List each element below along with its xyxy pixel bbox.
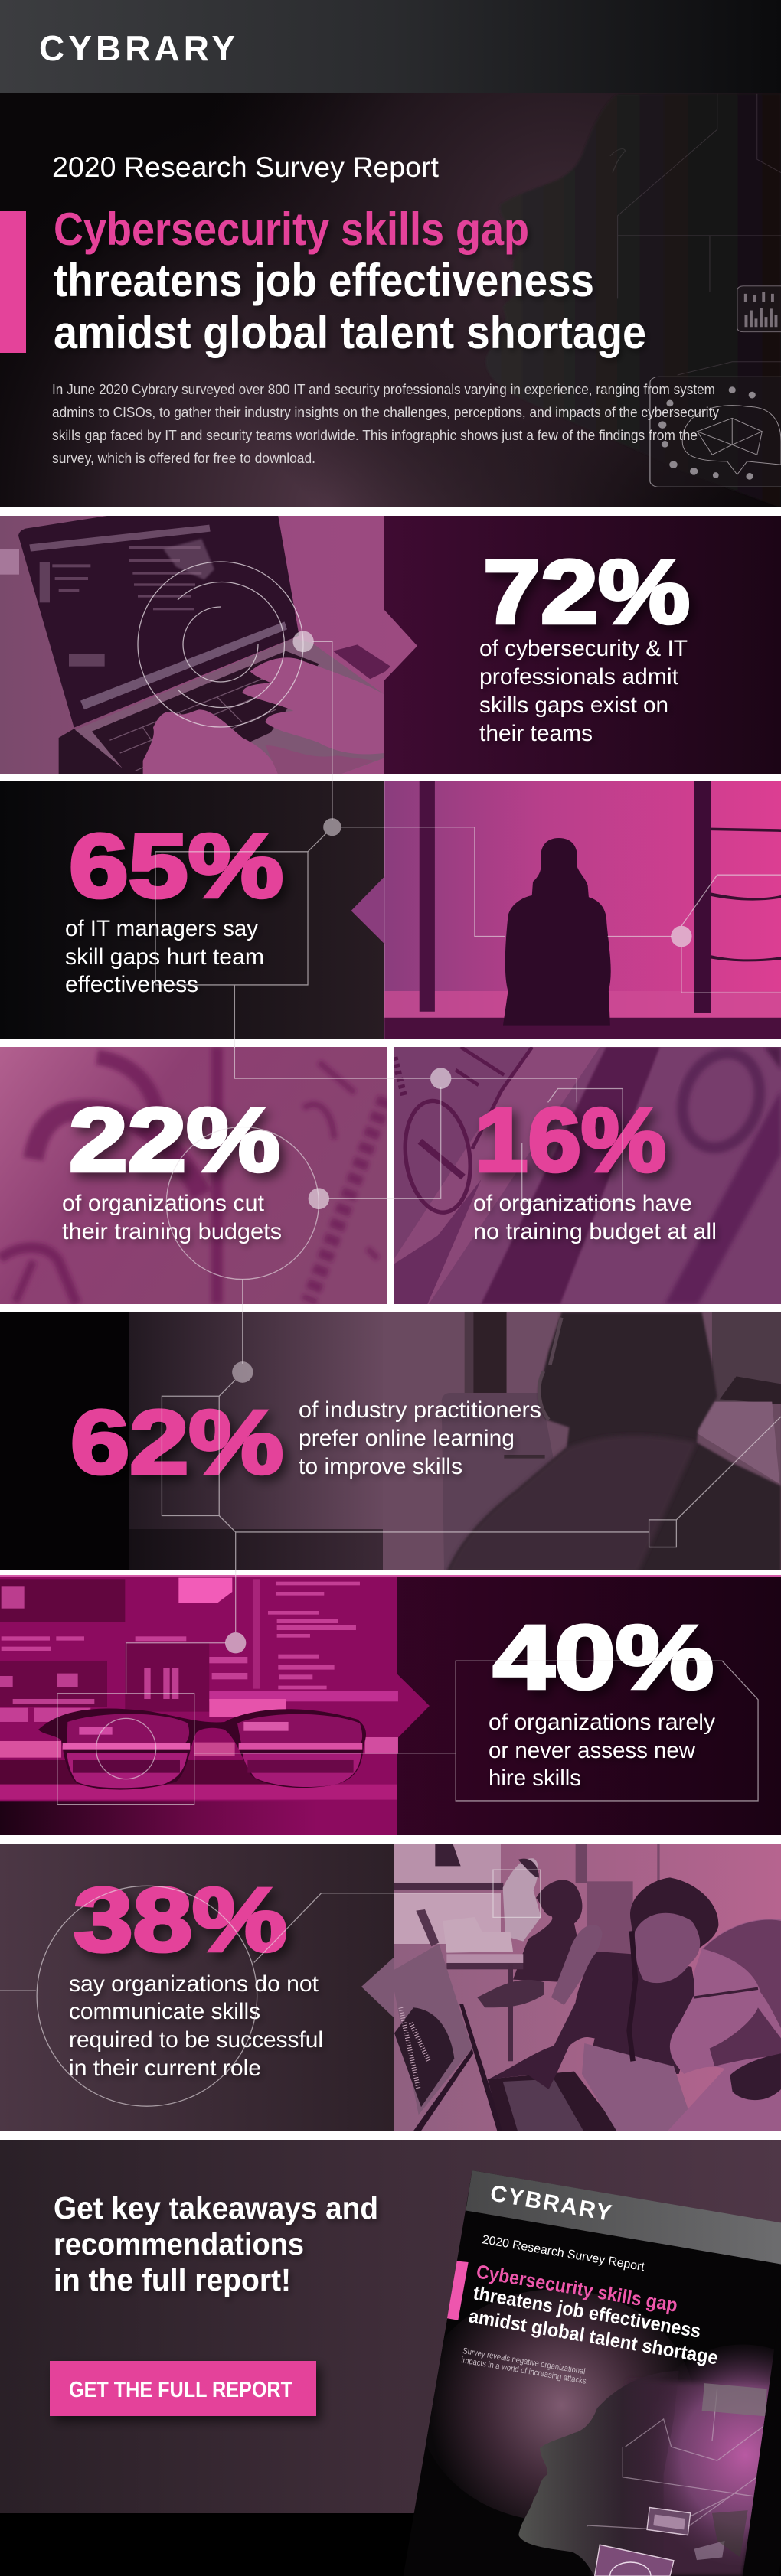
button: get the full report: [50, 2361, 316, 2416]
description: communicate skills: [69, 1999, 260, 2024]
node: [309, 1188, 329, 1209]
description: effectiveness: [65, 972, 198, 997]
panel: 72% stat: [0, 516, 781, 774]
image: team around a laptop: [390, 1844, 781, 2133]
image: blurred currency: [0, 1047, 385, 1304]
node: [323, 818, 341, 836]
image: glasses in front of code screen: [0, 1577, 430, 1837]
image: laptop and hands: [0, 516, 423, 774]
image: brain network widget: [650, 377, 781, 487]
chevron notch: [0, 1844, 394, 2131]
stat 40%: 40%: [493, 1607, 714, 1708]
heading: call to action: Get key takeaways and: [54, 2190, 378, 2225]
divider: pink line above 40% panel: [0, 1575, 781, 1577]
intro paragraph: survey, which is offered for free to download.: [52, 451, 315, 466]
description: their training budgets: [62, 1219, 282, 1244]
description: say organizations do not: [69, 1971, 319, 1997]
image: report cover: Cybersecurity skills gap: [475, 2261, 679, 2317]
connector network: [0, 631, 781, 2106]
node: [430, 1068, 451, 1089]
title: threatens job effectiveness: [54, 255, 594, 306]
stat 62%: 62%: [70, 1392, 283, 1493]
description: of cybersecurity & IT: [479, 636, 688, 661]
image: currency close-up: [394, 1042, 781, 1304]
description: to improve skills: [299, 1454, 462, 1479]
heading: call to action: [54, 2190, 378, 2297]
description: required to be successful: [69, 2027, 323, 2053]
stat 16%: 16%: [475, 1090, 666, 1191]
description: [489, 1710, 715, 1791]
description: [473, 1191, 717, 1244]
description: hire skills: [489, 1766, 581, 1791]
node: [232, 1361, 253, 1383]
panel: 62% stat: [0, 1312, 781, 1573]
image: report cover: 2020 Research Survey Report: [481, 2233, 646, 2274]
stat 22%: 22%: [69, 1090, 280, 1191]
title: amidst global talent shortage: [54, 307, 646, 358]
image: concentric arcs: [138, 562, 303, 727]
description: [299, 1397, 541, 1479]
description: skill gaps hurt team: [65, 944, 264, 970]
panel: 38% stat: [0, 1844, 781, 2133]
header bar: [0, 0, 781, 93]
intro paragraph: In June 2020 Cybrary surveyed over 800 IT and security professionals varying in experience, ranging from system: [52, 382, 715, 397]
image: chart widget: [737, 286, 781, 332]
image: report cover: CYBRARY: [489, 2180, 613, 2226]
description: in their current role: [69, 2056, 261, 2081]
panel: call to action: [0, 2140, 781, 2576]
description: [69, 1971, 323, 2081]
panel: 16% stat: [394, 1042, 781, 1304]
chevron panel background: [384, 516, 781, 774]
button: get the full report: GET THE FULL REPORT: [69, 2378, 292, 2402]
stat 38%: 38%: [74, 1870, 287, 1971]
image: report cover: Survey reveals negative organizational: [462, 2346, 586, 2376]
description: skills gaps exist on: [479, 693, 668, 718]
description: of industry practitioners: [299, 1397, 541, 1423]
heading: survey label: 2020 Research Survey Report: [52, 152, 440, 183]
stat 65%: 65%: [69, 816, 283, 917]
description: their teams: [479, 721, 593, 746]
node: [292, 631, 314, 652]
description: of organizations have: [473, 1191, 692, 1216]
description: [66, 920, 263, 992]
title: Cybersecurity skills gap: [54, 204, 529, 255]
description: [62, 1191, 282, 1244]
panel: 22% stat: [0, 1047, 387, 1304]
heading: call to action: recommendations: [54, 2226, 304, 2261]
description: of IT managers say: [65, 916, 258, 941]
logo: CYBRARY: [39, 28, 235, 68]
image: face silhouette: [485, 94, 781, 508]
image: laptop chevron tip: [361, 1958, 394, 2017]
image: report cover: amidst global talent shortage: [467, 2305, 720, 2369]
panel: hero: [0, 93, 781, 508]
image: silhouetted person by the sea: [351, 779, 781, 1042]
image: person with headphones: [383, 1312, 781, 1573]
image: report cover: threatens job effectiveness: [472, 2282, 702, 2343]
description: or never assess new: [489, 1738, 695, 1763]
accent bar: [0, 211, 26, 353]
image: report cover: [398, 2170, 781, 2576]
intro paragraph: [52, 382, 719, 466]
panel: 40% stat: [0, 1577, 781, 1837]
intro paragraph: skills gap faced by IT and security teams worldwide. This infographic shows just a few of the findings from the: [52, 428, 698, 443]
description: [479, 636, 688, 746]
title: [54, 204, 646, 358]
description: prefer online learning: [299, 1426, 515, 1451]
description: of organizations cut: [62, 1191, 265, 1216]
heading: call to action: in the full report!: [54, 2262, 291, 2297]
node: [671, 926, 692, 947]
intro paragraph: admins to CISOs, to gather their industry insights on the challenges, perceptions, and impacts of the cybersecurity: [52, 405, 719, 420]
description: professionals admit: [479, 664, 679, 690]
stat 72%: 72%: [483, 542, 690, 643]
node: [225, 1632, 246, 1653]
description: no training budget at all: [473, 1219, 717, 1244]
image: report cover: impacts in a world of increasing attacks.: [460, 2356, 589, 2386]
panel: 65% stat: [0, 779, 781, 1042]
description: of organizations rarely: [489, 1710, 715, 1735]
